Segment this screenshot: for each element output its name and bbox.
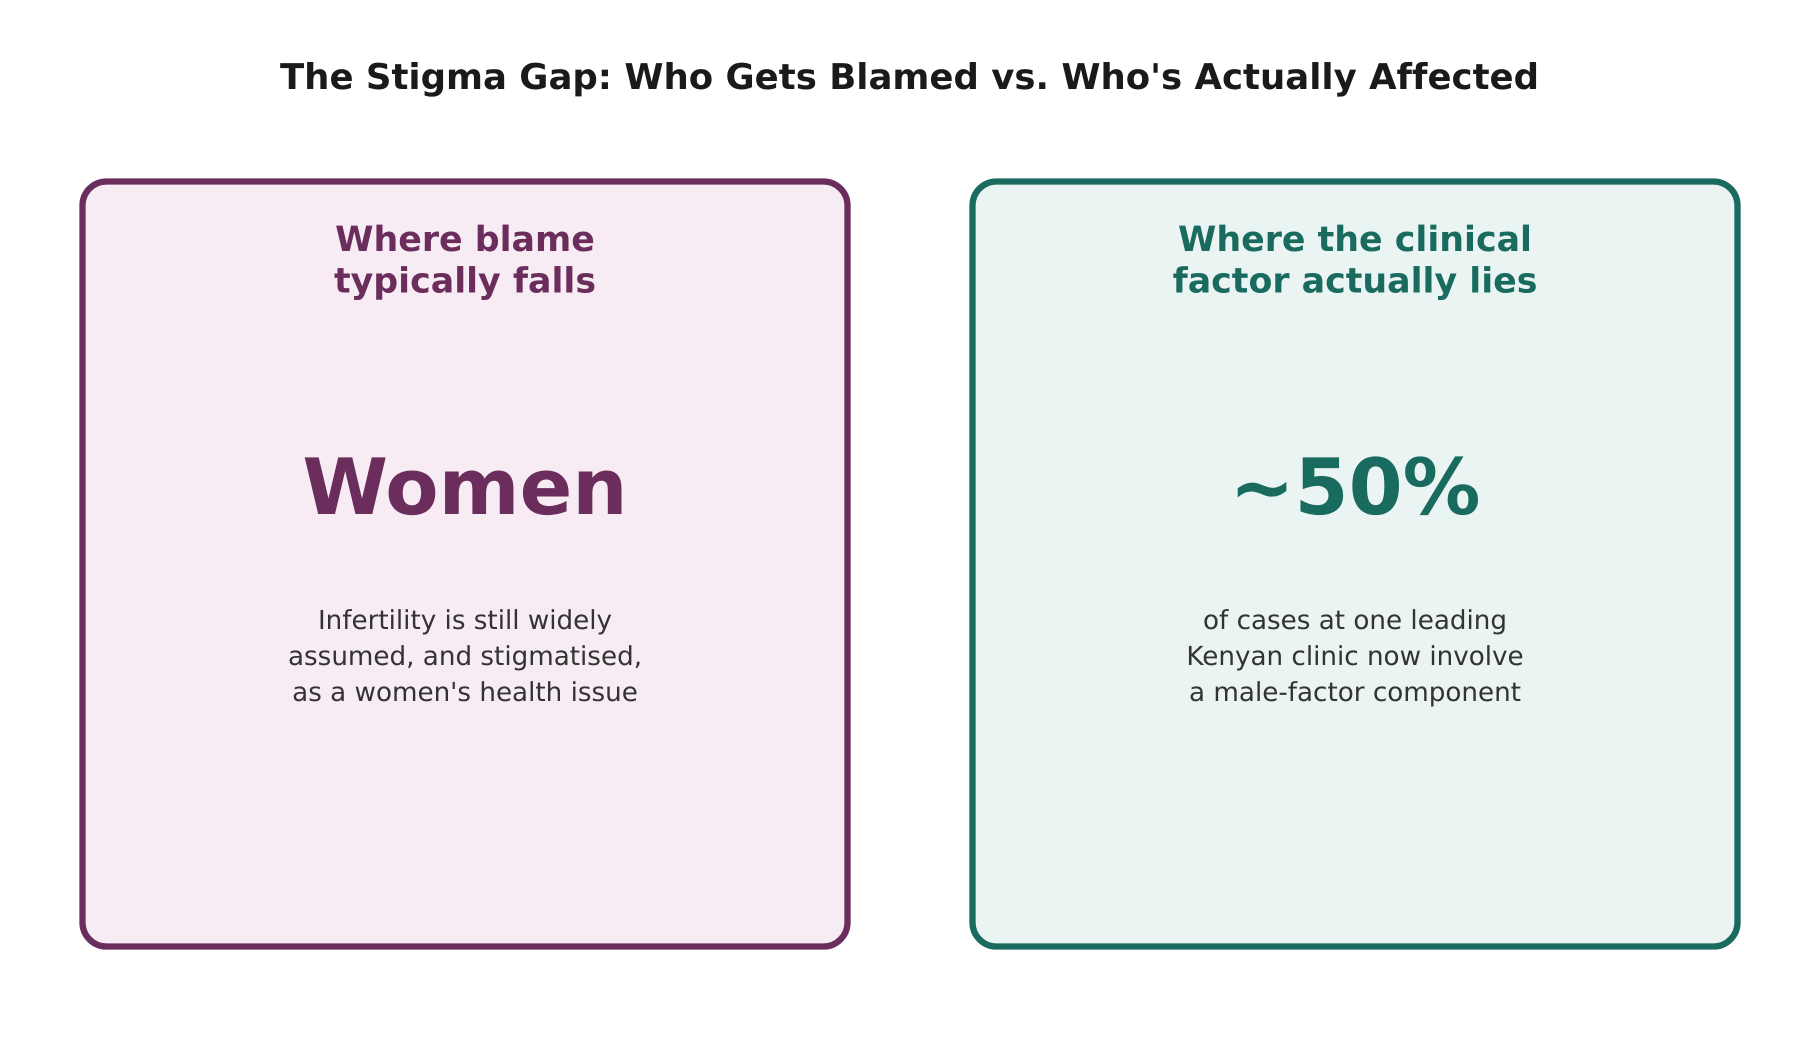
- description: Kenyan clinic now involve: [1186, 642, 1524, 672]
- description: a male-factor component: [1189, 678, 1521, 708]
- panel background: [972, 182, 1738, 946]
- panel heading: typically falls: [334, 261, 596, 301]
- description: as a women's health issue: [292, 678, 638, 708]
- panel background: [82, 182, 848, 946]
- panel heading: Where the clinical: [1178, 220, 1532, 260]
- description: Infertility is still widely: [318, 606, 612, 636]
- big label: Women: Women: [302, 443, 628, 533]
- title: The Stigma Gap: Who Gets Blamed vs. Who's Actually Affected: [280, 57, 1539, 98]
- panel: clinical factor: [972, 182, 1738, 946]
- panel: where blame falls: [82, 182, 848, 946]
- panel heading: Where blame: [335, 220, 595, 260]
- description: of cases at one leading: [1203, 606, 1507, 636]
- big stat: ~50%: ~50%: [1229, 443, 1481, 533]
- panel heading: factor actually lies: [1173, 261, 1537, 301]
- description: assumed, and stigmatised,: [288, 642, 642, 672]
